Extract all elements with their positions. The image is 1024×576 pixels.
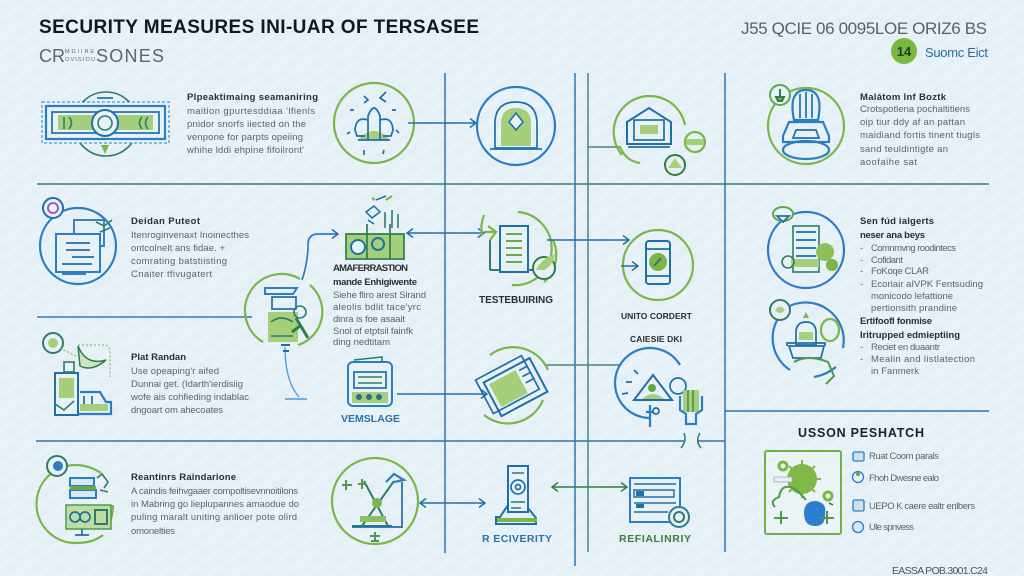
panel: row 1 item 1 (42, 92, 318, 156)
text block: Comnmvng roodintecs (871, 243, 956, 254)
panel: row 2 right item (768, 207, 983, 314)
text block: Cofidant (871, 255, 903, 266)
legend item 2: Fhoh Dwesne ealo (869, 473, 939, 484)
subtitle: CR (39, 46, 65, 66)
text block: - (860, 266, 863, 277)
text block: - (860, 243, 863, 254)
double arrow (397, 393, 487, 395)
icon: printer (348, 357, 392, 406)
text block: Cnaiter tfivugatert (131, 269, 212, 280)
icon: recovery device (496, 466, 537, 524)
text block: comrating batstiisting (131, 256, 227, 267)
panel: row 4 item 1 (36, 456, 299, 543)
text block: whihe lddi ehpine fifoilront' (186, 145, 304, 156)
icon: banknote (42, 92, 169, 156)
text block: wofe ais cohfieding indablac (130, 392, 249, 403)
icon: panels (36, 456, 113, 543)
text block: Malátom lnf Boztk (860, 92, 947, 103)
subtitle (39, 46, 164, 66)
text block: in Mabring go lieplupannes amaodue do (131, 499, 299, 510)
icon: module (346, 196, 404, 259)
double arrow (407, 232, 484, 234)
text block: aleolis bdlit tace'yrc (333, 302, 421, 313)
text block (860, 92, 980, 168)
badge: 14 (891, 38, 917, 64)
text block: - (860, 342, 863, 353)
icon: server stack (768, 207, 844, 288)
text block: Sen fúd ialgerts (860, 216, 934, 227)
text block: - (860, 255, 863, 266)
text block: AMAFERRASTION (333, 263, 408, 274)
legend item 1: Ruat Coom parals (869, 451, 939, 462)
arrow (547, 239, 629, 241)
panel: row 4 green circle icon (332, 458, 418, 544)
panel: row 1 right item (768, 85, 980, 168)
panel: reliability (619, 478, 691, 545)
title: SECURITY MEASURES INI-UAR OF TERSASEE (39, 17, 479, 38)
text block (860, 216, 983, 314)
panel: legend (765, 426, 975, 534)
label: VEMSLAGE (341, 413, 400, 425)
panel: vemslage (341, 357, 400, 425)
panel: testeburing (479, 212, 556, 306)
label: R ECIVERITY (482, 533, 552, 545)
text block: Itenroginvenaxt Inoinecthes (131, 230, 249, 241)
legend item 3: UEPO K caere ealtr enlbers (869, 501, 975, 512)
text block: dngoart om ahecoates (131, 405, 223, 416)
text block (860, 316, 975, 377)
text block: sand teuldintigte an (860, 144, 948, 155)
text block (130, 352, 249, 416)
text block: Plpeaktimaing seamaniring (187, 92, 318, 103)
text block: ontcolnelt ans fidae. + (131, 243, 225, 254)
arrow (408, 122, 476, 124)
icon: documents (40, 198, 116, 284)
panel: row 1 house icon (614, 96, 705, 175)
panel: row 3 item 1 (43, 333, 249, 416)
grid lines (36, 73, 989, 566)
text block: in Fanmerk (871, 366, 919, 377)
text block: Reantinrs Raindarione (131, 472, 236, 483)
double arrow (552, 486, 627, 488)
text block (333, 263, 426, 348)
text block: maidiand fortis tinent tiugls (860, 130, 980, 141)
text block: monicodo lefattione (871, 291, 953, 302)
text block: pnidor snorfs iiected on the (187, 119, 306, 130)
text block (186, 92, 318, 156)
text block: A caindis feihvgaaer compoltisevnnoitilons (131, 486, 298, 497)
panel: row 3 right item (770, 300, 975, 384)
label: TESTEBUIRING (479, 295, 553, 306)
text block: neser ana beys (860, 230, 925, 241)
panel: mobile icon (621, 230, 693, 300)
heading: USSON PESHATCH (798, 426, 924, 440)
header right caption: J55 QCIE 06 0095LOE ORIZ6 BS (741, 19, 987, 38)
text block: Ertifoofl fonmise (860, 316, 932, 327)
text block (131, 472, 299, 537)
legend illustration (765, 451, 841, 534)
panel: row 1 blue circle icon (477, 87, 555, 165)
subtitle: MGIIRE (65, 49, 94, 55)
icon: form with target (630, 478, 689, 527)
panel: row 1 green circle icon (334, 83, 414, 163)
text block: Use opeaping'r aifed (131, 366, 219, 377)
label: REFIALINRIY (619, 533, 691, 545)
panel: flow node icon (245, 274, 322, 345)
panel: recovery (482, 466, 552, 545)
text block: FoKoqe CLAR (871, 266, 929, 277)
panel: warning triangle icon (615, 348, 702, 427)
text block: Plat Randan (131, 352, 186, 363)
text block: Deidan Puteot (131, 216, 201, 227)
panel: tilted document icon (476, 347, 548, 423)
text block: - (860, 279, 863, 290)
text block (131, 216, 249, 280)
legend item 4: Ule spnvess (869, 522, 914, 533)
legend item 4 (852, 522, 914, 533)
text block: ding nedtitam (333, 337, 390, 348)
text block: Crotspotlena pochaltitiens (860, 104, 970, 115)
subtitle: SONES (96, 46, 164, 66)
double arrow (420, 502, 485, 504)
icon: dome (770, 300, 844, 384)
text block: Iritrupped edmieptiing (860, 330, 960, 341)
icon: server (481, 212, 556, 285)
text block: omonelties (131, 526, 175, 537)
badge: 14: 14 (897, 44, 912, 59)
text block: Mealin and listlatection (871, 354, 975, 365)
icon: machine (43, 333, 111, 415)
text block: Snol of etptsil fainfk (333, 326, 413, 337)
text block: Siehe fliro arest Sirand (333, 290, 426, 301)
text block: mande Enhigiwente (333, 277, 417, 288)
curved connector arrow (302, 234, 338, 280)
label: CAIESIE DKI (630, 334, 682, 344)
text block: puling maralt uniting anlioer pote olird (131, 512, 297, 523)
icon: chair (768, 85, 844, 164)
label: UNITO CORDERT (621, 311, 693, 321)
text block: Ecoriair aIVPK Fentsuding (871, 279, 983, 290)
text block: - (860, 354, 863, 365)
text block: maition gpurtesddiaa 'lfienls (187, 106, 315, 117)
text block: venpone for parpts opeiing (187, 132, 303, 143)
text block: oip tiur ddy af an pattan (860, 117, 965, 128)
text block: aoofaihe sat (860, 157, 917, 168)
pole (281, 345, 307, 399)
subtitle: OVISIOU (65, 57, 95, 63)
panel: row 2 item 1 (40, 198, 249, 284)
text block: Dunnai get. (Idarth'ierdisiig (131, 379, 243, 390)
badge label: Suomc Eict (925, 45, 988, 60)
panel: central top icon and text (333, 196, 426, 348)
text block: Reciet en duaantr (871, 342, 940, 353)
text block: pertionsith prandine (871, 303, 957, 314)
text block: dinra is foe asaait (333, 314, 405, 325)
